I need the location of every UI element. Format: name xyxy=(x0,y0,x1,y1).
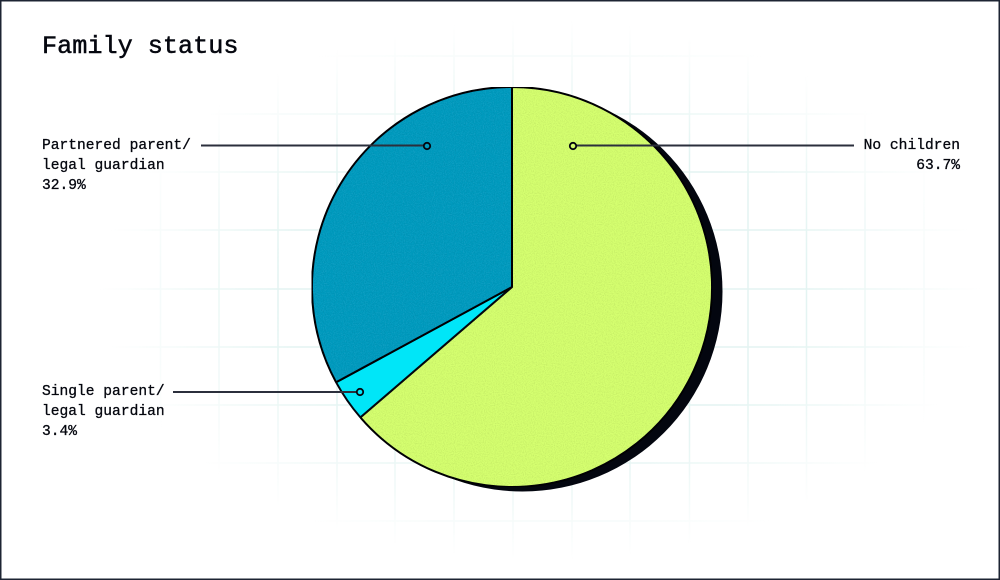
label: single parent xyxy=(42,384,165,440)
label: single parent: legal guardian xyxy=(42,404,165,420)
label: partnered parent: legal guardian xyxy=(42,158,165,174)
label: no children xyxy=(864,138,960,174)
label: single parent: Single parent/ xyxy=(42,384,165,400)
leader line: single parent xyxy=(173,389,363,395)
label: single parent: 3.4% xyxy=(42,424,77,440)
label: partnered parent: 32.9% xyxy=(42,178,86,194)
leader line: partnered parent xyxy=(201,143,430,149)
label: partnered parent xyxy=(42,138,191,194)
slice: no children 63.7% xyxy=(360,87,712,487)
pie shadow xyxy=(322,92,722,492)
label: no children: 63.7% xyxy=(916,158,960,174)
slice: partnered parent 32.9% xyxy=(312,87,512,382)
pie chart xyxy=(312,87,722,491)
label: no children: No children xyxy=(864,138,960,154)
leader line: no children xyxy=(570,143,854,149)
title: Family status xyxy=(42,32,238,61)
slice: single parent 3.4% xyxy=(336,287,512,417)
label: partnered parent: Partnered parent/ xyxy=(42,138,191,154)
